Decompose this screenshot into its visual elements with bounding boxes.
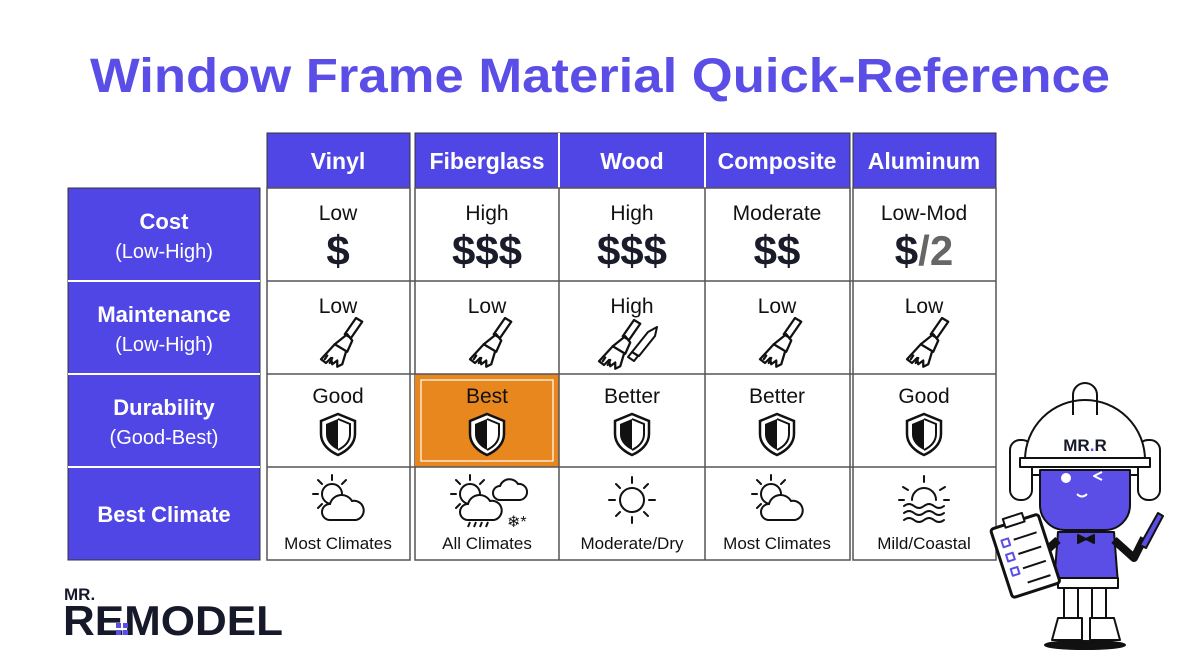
durability row: Better [749, 385, 805, 408]
mascot robot [989, 383, 1163, 649]
durability row: Good [898, 385, 950, 408]
row labels: (Low-High) [115, 241, 213, 263]
column headers [267, 133, 996, 188]
cost row: $$ [754, 227, 800, 274]
climate row: ❄* [507, 514, 527, 531]
maintenance row: Low [319, 295, 358, 318]
durability row: Best [466, 385, 508, 408]
row labels: (Low-High) [115, 334, 213, 356]
climate row: All Climates [442, 534, 532, 553]
durability row: Better [604, 385, 660, 408]
table [68, 133, 996, 560]
cost row: Low-Mod [881, 202, 967, 225]
maintenance row: High [610, 295, 654, 318]
cost row: $$$ [597, 227, 667, 274]
durability row [312, 385, 950, 455]
maintenance row: Low [905, 295, 944, 318]
cost row: High [610, 202, 654, 225]
mascot robot: MR.R [1063, 436, 1107, 455]
column headers: Fiberglass [429, 148, 545, 174]
cost row: $$$ [452, 227, 522, 274]
row labels: Maintenance [97, 302, 231, 327]
row labels: Durability [113, 395, 215, 420]
row labels: Best Climate [97, 502, 231, 527]
climate row [284, 475, 971, 553]
column headers: Vinyl [311, 148, 365, 174]
maintenance row [319, 295, 948, 369]
row labels: Cost [140, 209, 189, 234]
row labels: (Good-Best) [110, 427, 218, 449]
cost row [319, 202, 967, 274]
maintenance row: Low [468, 295, 507, 318]
cost row: High [465, 202, 509, 225]
row labels [68, 188, 260, 560]
column headers: Wood [600, 148, 664, 174]
cost row: Low [319, 202, 358, 225]
climate row: Most Climates [284, 534, 392, 553]
cost row: $ [326, 227, 350, 274]
durability row: Good [312, 385, 364, 408]
column headers: Aluminum [868, 148, 980, 174]
logo: MR. [64, 585, 95, 604]
cost row: Moderate [733, 202, 821, 225]
body grid [267, 188, 996, 560]
maintenance row: Low [758, 295, 797, 318]
climate row: Most Climates [723, 534, 831, 553]
highlight: fiberglass best [415, 374, 559, 467]
logo: REMODEL [63, 597, 283, 644]
cost row: $/2 [895, 227, 953, 274]
climate row: Moderate/Dry [581, 534, 684, 553]
climate row: Mild/Coastal [877, 534, 971, 553]
column headers: Composite [718, 148, 836, 174]
title: Window Frame Material Quick-Reference [90, 50, 1110, 103]
